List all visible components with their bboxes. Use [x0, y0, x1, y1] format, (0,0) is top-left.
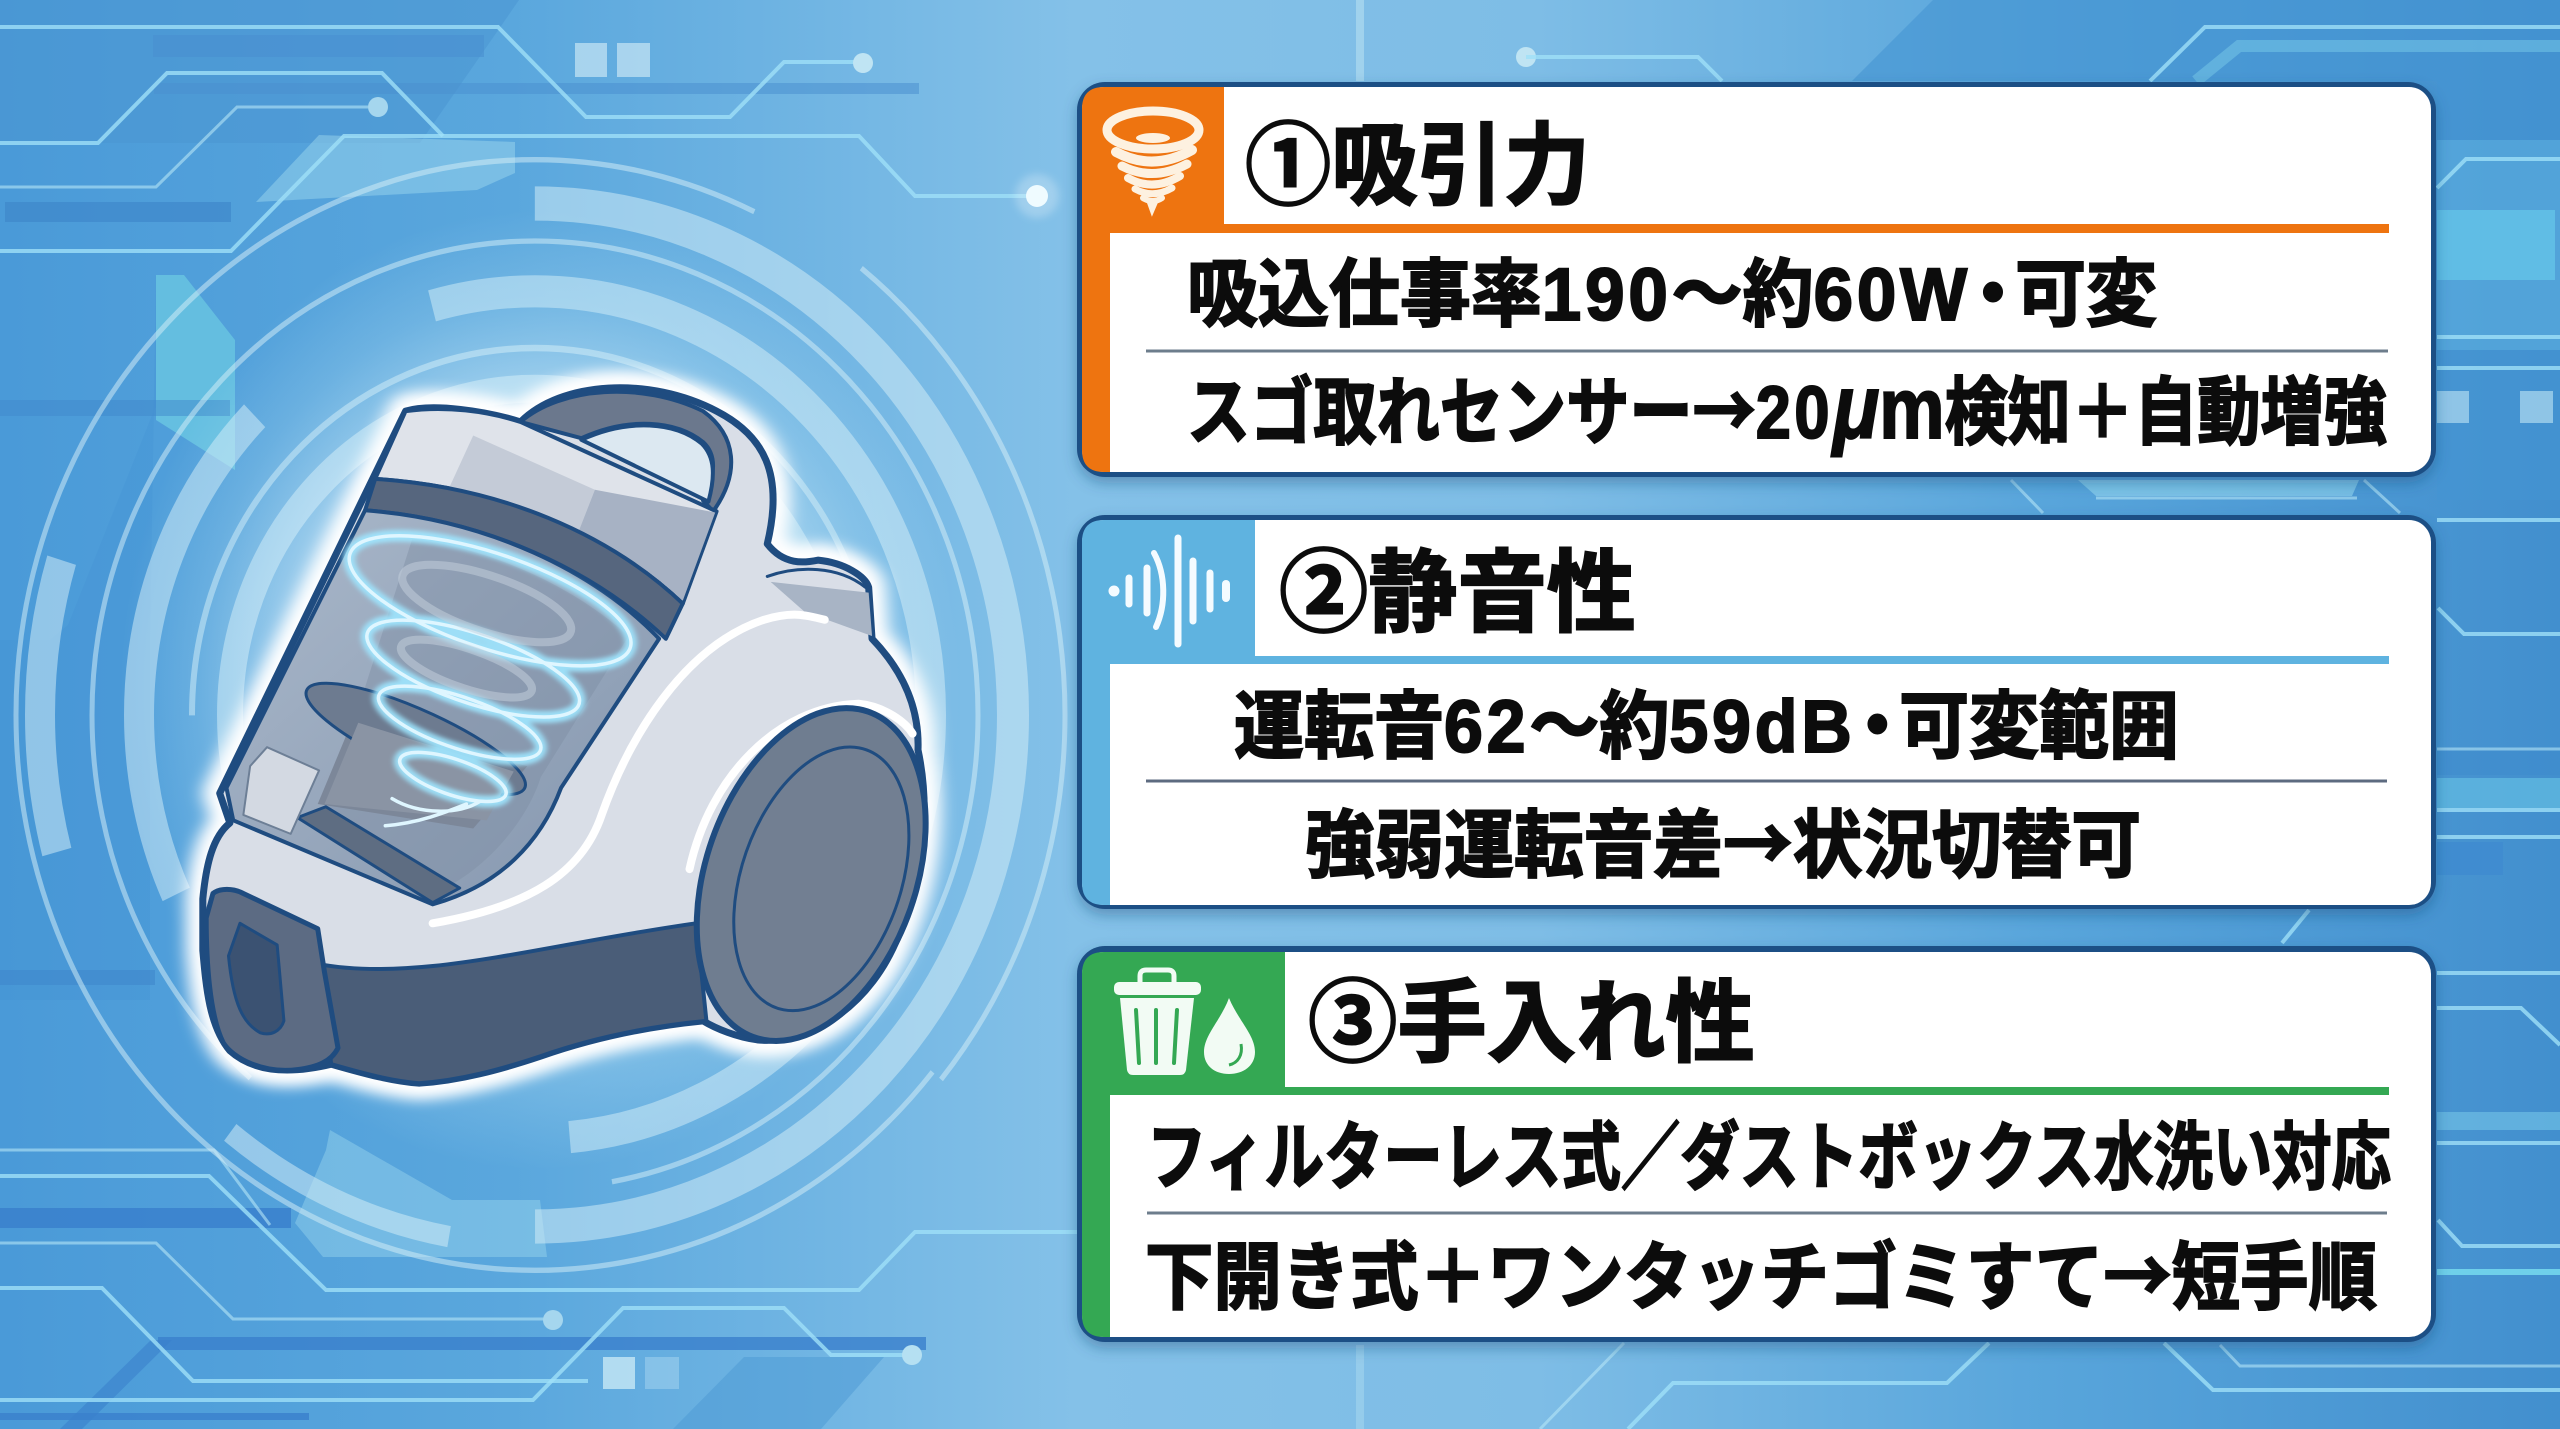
- body white highlight curve: [433, 615, 825, 923]
- transparent dust bin: [226, 510, 659, 904]
- text: operating noise: 運転音62〜約59dB・可変範囲: [1234, 685, 2179, 768]
- radial glow behind the vacuum: [120, 210, 960, 1170]
- panel 2: quietness: [1077, 515, 2436, 909]
- text: strong and weak noise difference: 強弱運転音差→状況切替可: [1305, 786, 2141, 893]
- dust bin lid: [365, 409, 717, 639]
- lower dark base: [318, 923, 706, 1083]
- icon: tornado: [1107, 111, 1199, 214]
- nozzle: [206, 889, 338, 1070]
- panel 1: suction power: [1077, 82, 2436, 477]
- concentric tech rings around the vacuum: [5, 148, 1065, 1282]
- icon: trash can and water drop: [1114, 970, 1255, 1075]
- handle: [521, 392, 731, 511]
- text: dust sensor: スゴ取れセンサー→20μm検知＋自動増強: [1187, 353, 2387, 460]
- illustration: canister vacuum cleaner with swirl: [203, 388, 963, 1083]
- heading: ease of maintenance: ③手入れ性: [1308, 974, 1755, 1074]
- panel 3: ease of maintenance: [1077, 946, 2436, 1342]
- heading: quietness: ②静音性: [1279, 544, 1636, 644]
- swirl: [328, 509, 652, 826]
- wheel: [660, 690, 963, 1059]
- heading: suction power: ①吸引力: [1245, 117, 1590, 217]
- text: suction work rate: 吸込仕事率190〜約60W・可変: [1187, 253, 2157, 336]
- icon: sound wave: [1108, 538, 1226, 644]
- text: bottom opening one-touch disposal: 下開き式＋ワンタッチゴミすて→短手順: [1145, 1218, 2377, 1325]
